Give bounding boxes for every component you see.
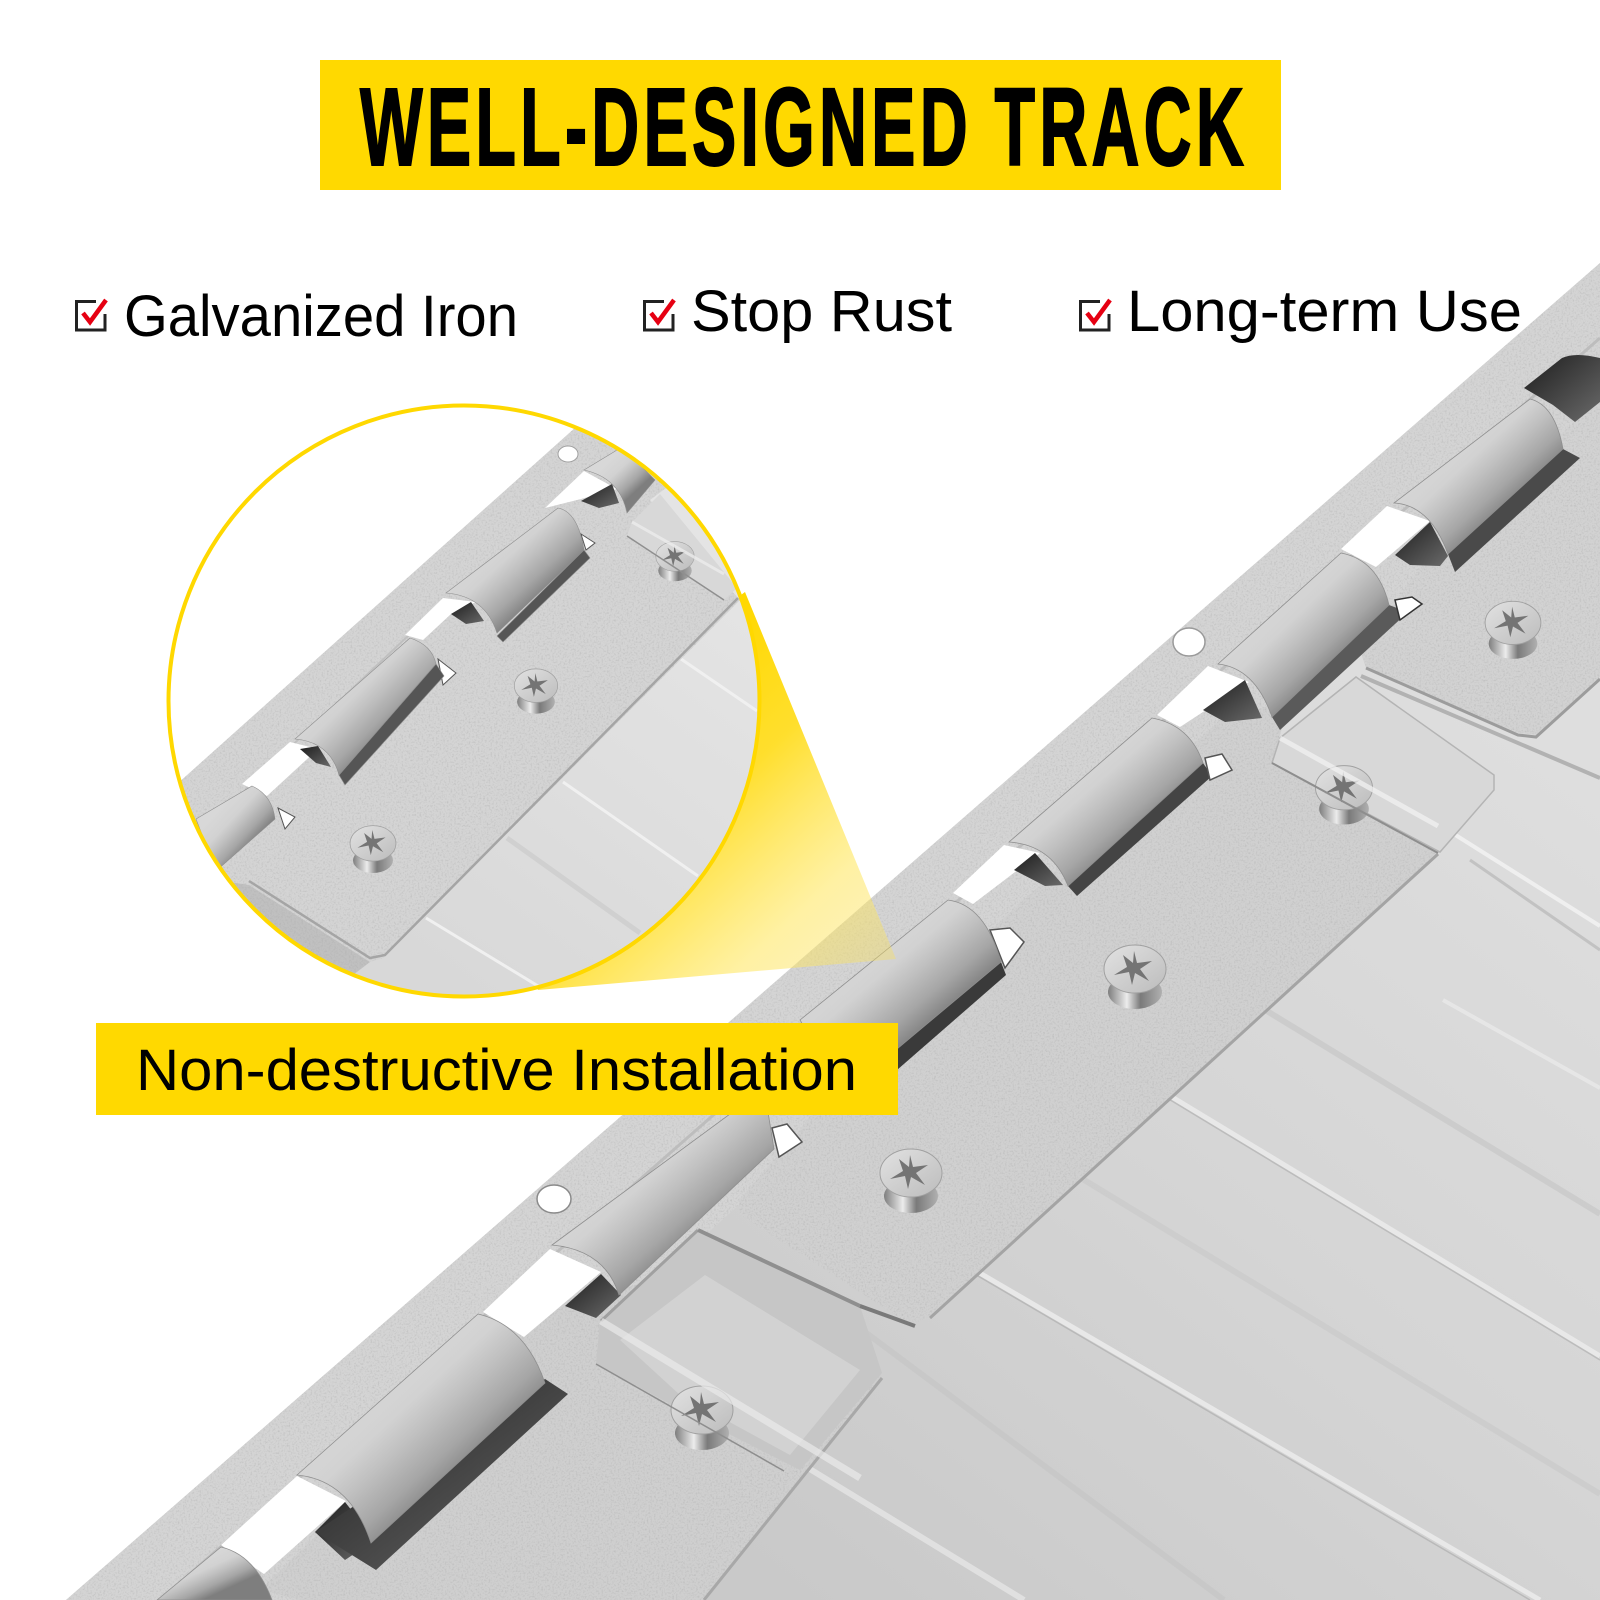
callout bar: non-destructive installation: Non-destructive Installation [136, 1038, 857, 1103]
checkbox icon [76, 300, 106, 330]
checkbox icon [1080, 300, 1110, 330]
title banner [320, 60, 1281, 190]
clear strap ribbons over screws [596, 738, 1438, 1478]
white gaps and shadows between hinges [221, 355, 1600, 1574]
plate: centre [739, 700, 1438, 1323]
hole in circle [558, 446, 578, 462]
magnifier cone [464, 592, 896, 990]
plate edge [249, 598, 738, 958]
clear strap in circle [627, 494, 737, 600]
magnified detail circle [166, 404, 762, 998]
plate edges and shadows [704, 668, 1600, 1600]
screws in circle [350, 542, 694, 873]
top right opening [1524, 355, 1600, 422]
mounting holes [537, 628, 1205, 1213]
metal in circle [182, 429, 740, 974]
tubes in circle [196, 447, 655, 871]
plate: lower left [260, 1270, 882, 1600]
checkbox icon [644, 300, 674, 330]
strips in circle [186, 488, 758, 994]
clear strap: lower plate [596, 1230, 915, 1470]
plate: top right [1360, 400, 1600, 735]
clear strap ribbon in circle [627, 522, 724, 600]
gaps in circle [242, 471, 619, 829]
feature: galvanized iron: Galvanized Iron [124, 284, 518, 349]
hinge tubes [157, 399, 1563, 1600]
rail ridge [160, 338, 1600, 1600]
clear strap: centre plate [1272, 677, 1494, 852]
feature: stop rust: Stop Rust [691, 279, 952, 344]
feature: long-term use: Long-term Use [1127, 279, 1522, 344]
callout bar: non-destructive installation [96, 1023, 898, 1115]
small slots [772, 597, 1422, 1157]
slot shadows under hinges [315, 449, 1580, 1570]
screws [671, 601, 1541, 1450]
